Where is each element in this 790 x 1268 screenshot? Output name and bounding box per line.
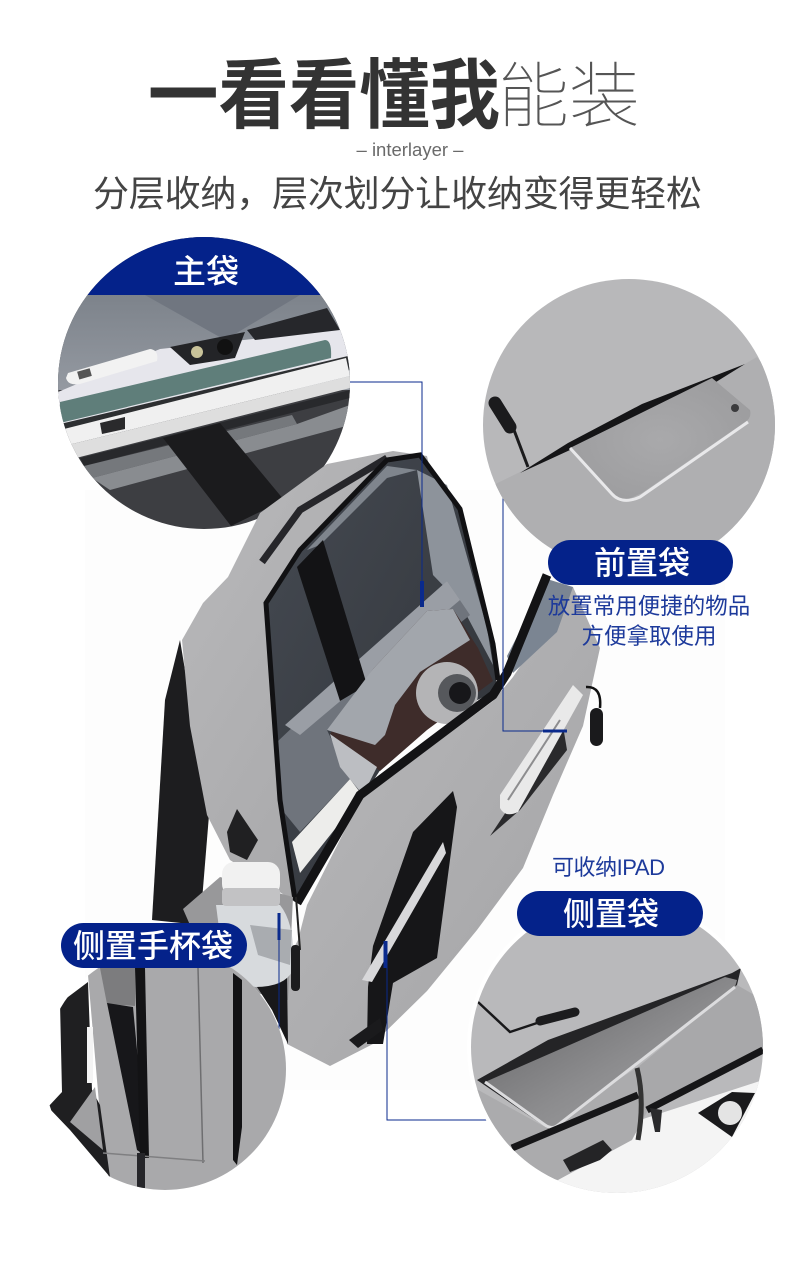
header cap: 主袋 (88, 237, 320, 295)
tablet and lower lining (80, 390, 350, 466)
hanging zipper pull (586, 687, 603, 746)
top lining strip (307, 466, 417, 550)
power bank (66, 349, 157, 384)
upper pocket (100, 968, 135, 1006)
zipper pull (637, 1068, 641, 1140)
label: 侧置袋 (517, 891, 703, 936)
zipper band (512, 1095, 638, 1148)
bottom seam (103, 1153, 205, 1161)
side pocket opening (362, 791, 457, 1044)
carrying loop (698, 1092, 755, 1137)
lower body (471, 1000, 763, 1180)
tablet (570, 378, 750, 502)
panel: side pocket circle (471, 926, 763, 1193)
flap (70, 1087, 103, 1150)
front body (282, 587, 600, 1066)
title (148, 40, 640, 142)
black stripe (233, 973, 242, 1165)
top black zipper arc (262, 458, 387, 562)
shoulder strap (152, 640, 209, 925)
white lining (58, 324, 350, 428)
title: 能装 (498, 40, 640, 142)
zipper edge: front (297, 575, 547, 903)
magazines (60, 358, 350, 445)
flap edge and pull (478, 1002, 575, 1032)
strap (48, 982, 110, 1177)
backpack illustration (152, 451, 603, 1066)
panel: main pocket circle (58, 237, 350, 529)
camera (327, 609, 493, 795)
label: 侧置手杯袋: 侧置手杯袋 (73, 928, 233, 964)
water bottle (216, 862, 293, 987)
bottom white ground (558, 1082, 759, 1193)
label: 侧置袋: 侧置袋 (563, 896, 659, 932)
black handle strap (163, 423, 284, 526)
mesh pocket (107, 1003, 140, 1152)
subtitle: description: 分层收纳，层次划分让收纳变得更轻松 (93, 173, 702, 214)
lower tray (277, 581, 470, 832)
subtitle: interlayer: – interlayer – (357, 139, 464, 160)
header cap: 主袋: 主袋 (173, 253, 239, 290)
black pocket opening (477, 968, 741, 1130)
zipper column (135, 968, 149, 1158)
text: can store iPad: 可收纳IPAD (552, 855, 665, 880)
front pocket window (507, 579, 573, 673)
gray body (88, 960, 290, 1195)
black under bottle (257, 975, 288, 1044)
text: front pocket description: 方便拿取使用 (581, 623, 717, 649)
usb port (227, 809, 258, 860)
pen pouch (490, 685, 583, 836)
zipper pull (137, 1153, 145, 1188)
tablet (485, 977, 737, 1127)
text: front pocket description: 放置常用便捷的物品 (548, 594, 750, 619)
usb port (563, 1140, 612, 1172)
label: 侧置手杯袋 (61, 923, 247, 968)
zipper pull (495, 403, 528, 467)
connector lines (279, 382, 567, 1120)
green notebook (60, 340, 331, 423)
lower fabric (496, 358, 775, 550)
lower zipper pull (349, 1018, 383, 1048)
text: front pocket description (548, 594, 750, 649)
title: 一看看懂我 (148, 54, 500, 139)
label: 前置袋 (548, 540, 733, 585)
label: 前置袋: 前置袋 (594, 545, 690, 581)
pocket opening (520, 364, 745, 473)
seam (198, 968, 203, 1163)
panel: side cup pocket circle (50, 967, 286, 1190)
inner compartment (265, 456, 497, 900)
right lining (417, 470, 493, 665)
inner handle (297, 540, 367, 701)
side pocket (183, 877, 293, 1000)
side zipper pull (291, 897, 300, 991)
panel: front pocket circle (483, 279, 775, 571)
phone (247, 308, 340, 340)
zipper edge: inner (266, 455, 498, 900)
magazines (292, 779, 362, 873)
rear body (182, 451, 450, 900)
